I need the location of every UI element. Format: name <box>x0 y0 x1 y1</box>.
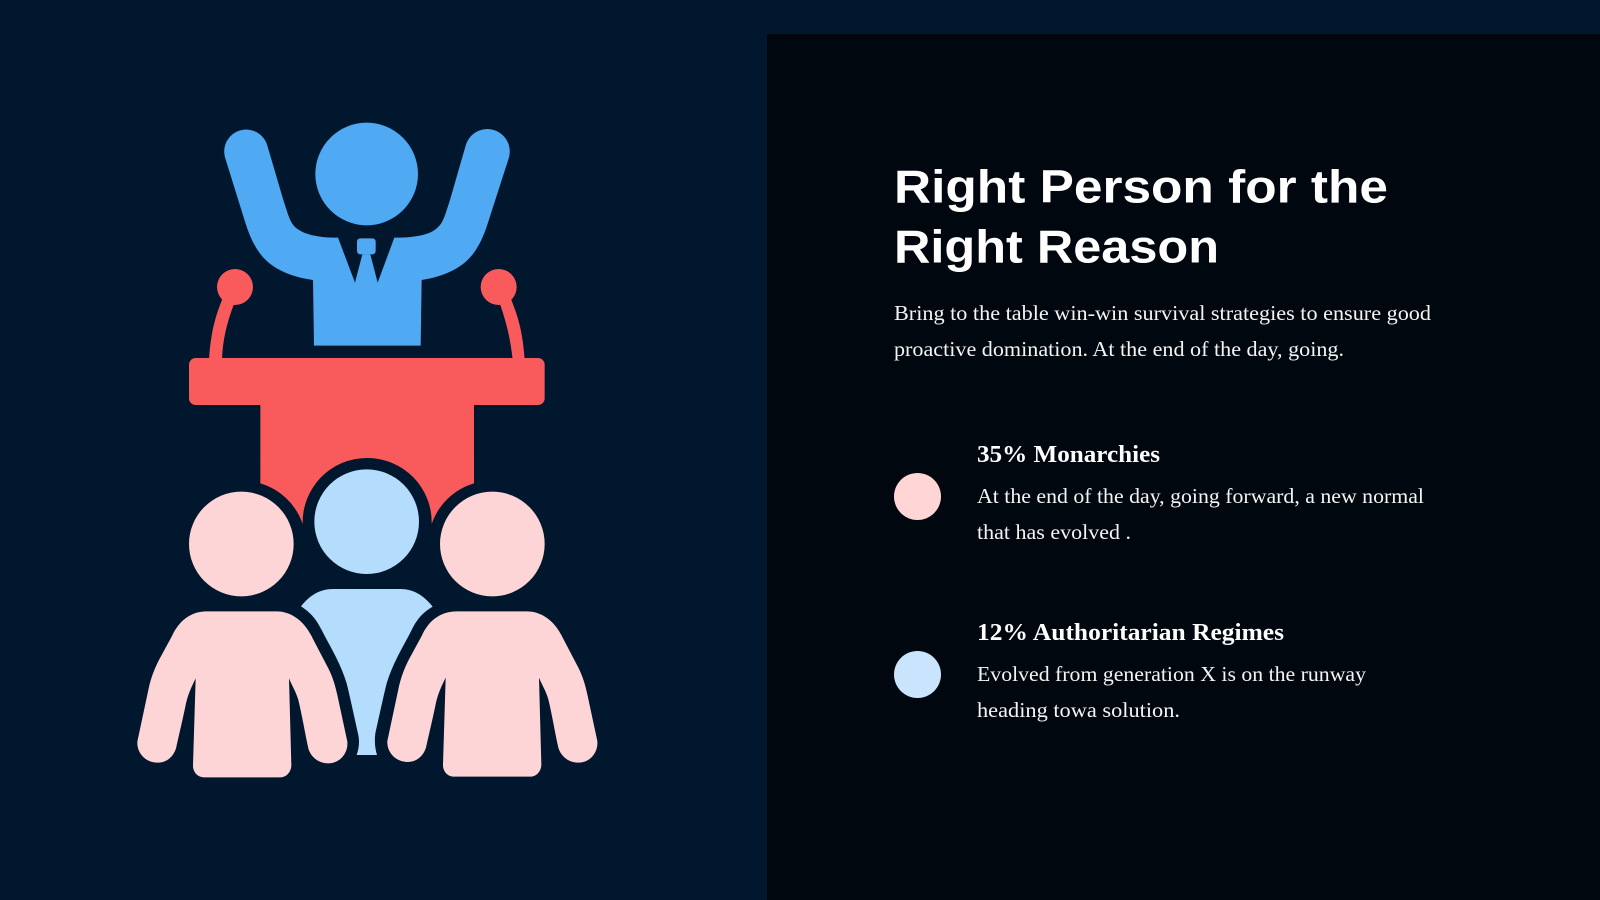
title: Right Person for the <box>894 160 1388 212</box>
text block: intro: proactive domination. At the end of the day, going. <box>894 337 1344 361</box>
text block: intro: Bring to the table win-win survival strategies to ensure good <box>894 301 1431 325</box>
text block: authoritarian description: heading towa solution. <box>977 698 1180 722</box>
title: Right Reason <box>894 220 1219 272</box>
illustration: speaker at podium with audience <box>137 123 597 777</box>
panel: right dark content <box>767 34 1600 900</box>
title <box>894 160 1388 272</box>
text block: authoritarian description: Evolved from generation X is on the runway <box>977 662 1366 686</box>
icon: blue bullet <box>894 651 941 698</box>
icon: audience member centre <box>301 469 433 755</box>
icon: speaker figure <box>224 123 510 346</box>
heading: 12% Authoritarian Regimes: 12% Authoritarian Regimes <box>977 620 1284 646</box>
list item: monarchies <box>894 442 1424 544</box>
icon: audience member left <box>137 492 347 777</box>
list item: authoritarian regimes <box>894 620 1366 722</box>
icon: podium with microphones <box>189 269 545 524</box>
heading: 35% Monarchies: 35% Monarchies <box>977 442 1160 468</box>
text block: intro <box>894 301 1431 361</box>
icon: pink bullet <box>894 473 941 520</box>
text block: monarchies description: that has evolved . <box>977 520 1131 544</box>
text block: authoritarian description <box>977 662 1366 722</box>
text block: monarchies description <box>977 484 1424 544</box>
icon: audience member right <box>387 492 597 777</box>
text block: monarchies description: At the end of the day, going forward, a new normal <box>977 484 1424 508</box>
